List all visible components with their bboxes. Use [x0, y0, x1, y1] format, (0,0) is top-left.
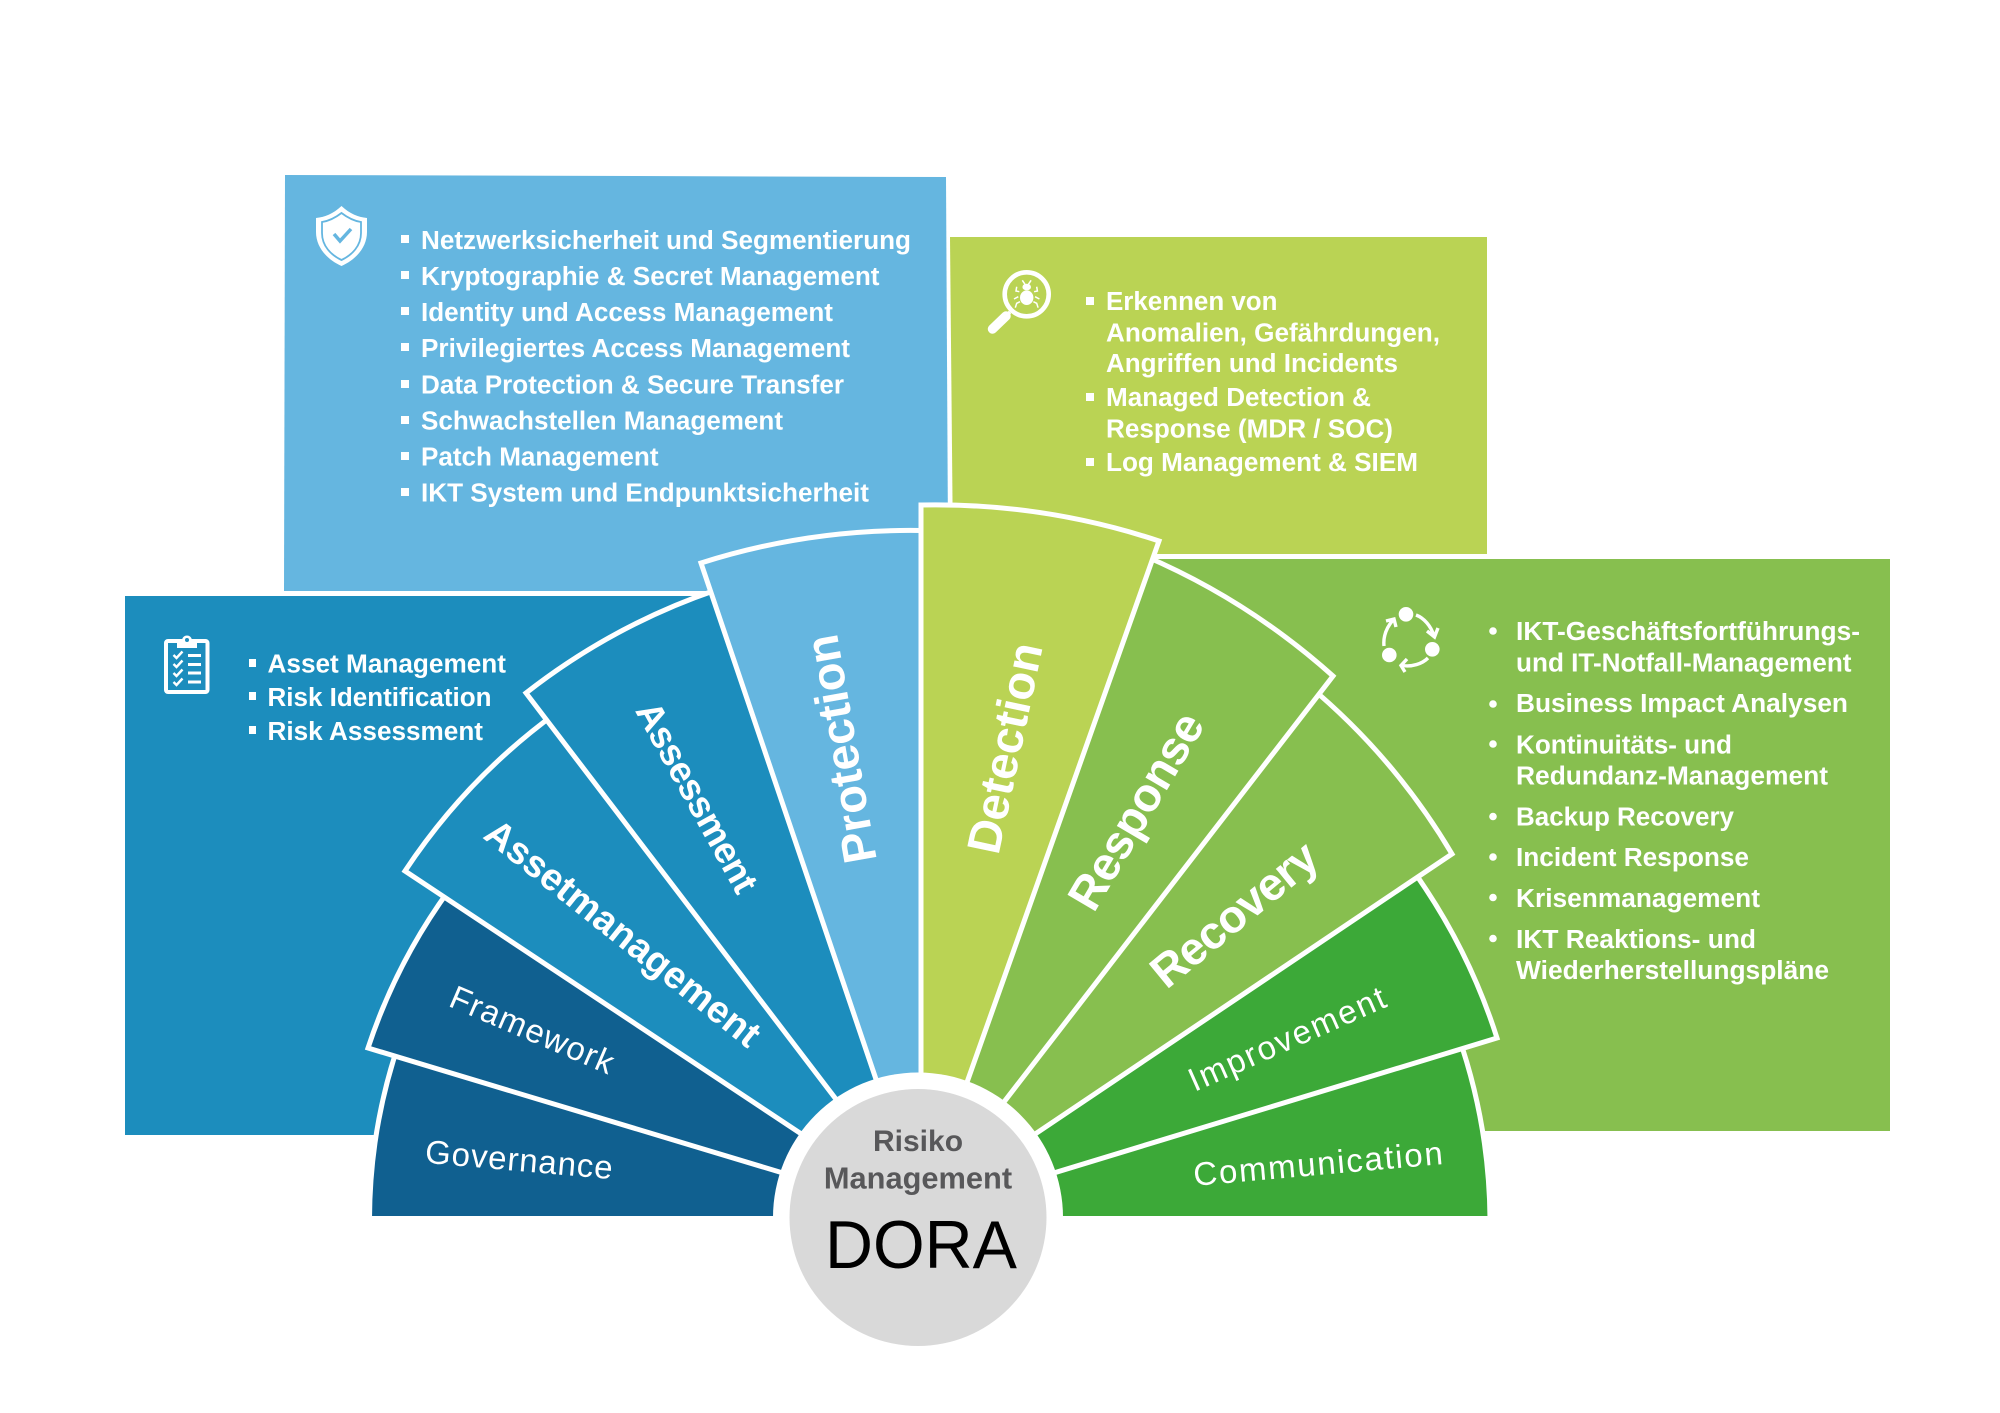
- wedge: Protection: [701, 530, 921, 1212]
- list: response and recovery items: IKT Reaktions- und: [1516, 926, 1756, 954]
- panel: response and recovery details: [1130, 559, 1890, 1131]
- panel: detection details: [950, 237, 1487, 554]
- list: protection items: Privilegiertes Access Management: [421, 335, 851, 363]
- list: response and recovery items: Kontinuitäts- und: [1516, 732, 1732, 760]
- list: detection items: Log Management & SIEM: [1106, 449, 1418, 477]
- panel: assessment details: [125, 596, 805, 1135]
- wedge: Recovery: Recovery: [1140, 830, 1328, 998]
- list: response and recovery items: Backup Recovery: [1516, 804, 1735, 832]
- list: protection items: IKT System und Endpunktsicherheit: [421, 480, 870, 508]
- list: protection items: Netzwerksicherheit und Segmentierung: [421, 227, 911, 255]
- list: response and recovery items: Business Impact Analysen: [1516, 690, 1848, 718]
- list: protection items: [401, 227, 911, 508]
- hub: Risiko Management DORA: [773, 1072, 1063, 1362]
- wedge: Governance: Governance: [424, 1133, 614, 1186]
- wedge: Assessment: [526, 590, 919, 1208]
- wedge: Improvement: Improvement: [1182, 979, 1391, 1098]
- wedge: Communication: [919, 1035, 1490, 1218]
- icon: magnifier with bug: [992, 272, 1049, 329]
- list: protection items: Data Protection & Secure Transfer: [421, 372, 844, 400]
- list: response and recovery items: IKT-Geschäftsfortführungs-: [1516, 618, 1860, 646]
- wedge: Framework: [368, 882, 919, 1214]
- wedge: Communication: Communication: [1192, 1134, 1444, 1193]
- list: detection items: Angriffen und Incidents: [1106, 350, 1398, 378]
- list: detection items: Response (MDR / SOC): [1106, 416, 1393, 444]
- list: asset and risk items: Risk Assessment: [268, 718, 484, 746]
- wedge: Framework: Framework: [444, 978, 620, 1081]
- list: asset and risk items: Asset Management: [268, 650, 507, 678]
- wedge: Governance: [370, 1040, 919, 1218]
- hub: Risiko Management DORA: DORA: [825, 1207, 1018, 1283]
- list: protection items: Patch Management: [421, 444, 659, 472]
- list: protection items: Schwachstellen Management: [421, 408, 784, 436]
- list: response and recovery items: Krisenmanagement: [1516, 885, 1761, 913]
- wedge: Assetmanagement: Assetmanagement: [476, 812, 769, 1056]
- wedge: Response: [919, 556, 1333, 1212]
- wedge: Assessment: Assessment: [628, 695, 766, 900]
- wedge: Protection: Protection: [794, 631, 887, 867]
- list: detection items: Anomalien, Gefährdungen,: [1106, 320, 1440, 348]
- list: detection items: Managed Detection &: [1106, 384, 1371, 412]
- wedge: Recovery: [919, 685, 1452, 1212]
- wedge: Detection: Detection: [956, 638, 1053, 858]
- wedge: Improvement: [919, 869, 1497, 1214]
- list: asset and risk items: [249, 650, 507, 746]
- list: detection items: Erkennen von: [1106, 288, 1278, 316]
- list: response and recovery items: Incident Response: [1516, 844, 1749, 872]
- icon: clipboard checklist: [166, 636, 208, 692]
- list: response and recovery items: [1489, 618, 1860, 985]
- panel: protection details: [284, 175, 948, 591]
- list: asset and risk items: Risk Identification: [268, 684, 492, 712]
- icon: cycle arrows: [1382, 607, 1440, 672]
- list: protection items: Identity und Access Management: [421, 299, 834, 327]
- icon: shield: [316, 206, 367, 266]
- list: detection items: [1086, 288, 1440, 477]
- hub: Risiko Management DORA: Risiko: [873, 1125, 963, 1158]
- list: response and recovery items: und IT-Notfall-Management: [1516, 650, 1852, 678]
- list: protection items: Kryptographie & Secret Management: [421, 263, 880, 291]
- hub: Risiko Management DORA: Management: [824, 1160, 1012, 1196]
- wedge: Assetmanagement: [405, 713, 919, 1212]
- list: response and recovery items: Redundanz-Management: [1516, 762, 1829, 790]
- wedge: Response: Response: [1057, 703, 1214, 919]
- wedge: Detection: [921, 505, 1159, 1212]
- list: response and recovery items: Wiederherstellungspläne: [1516, 957, 1829, 985]
